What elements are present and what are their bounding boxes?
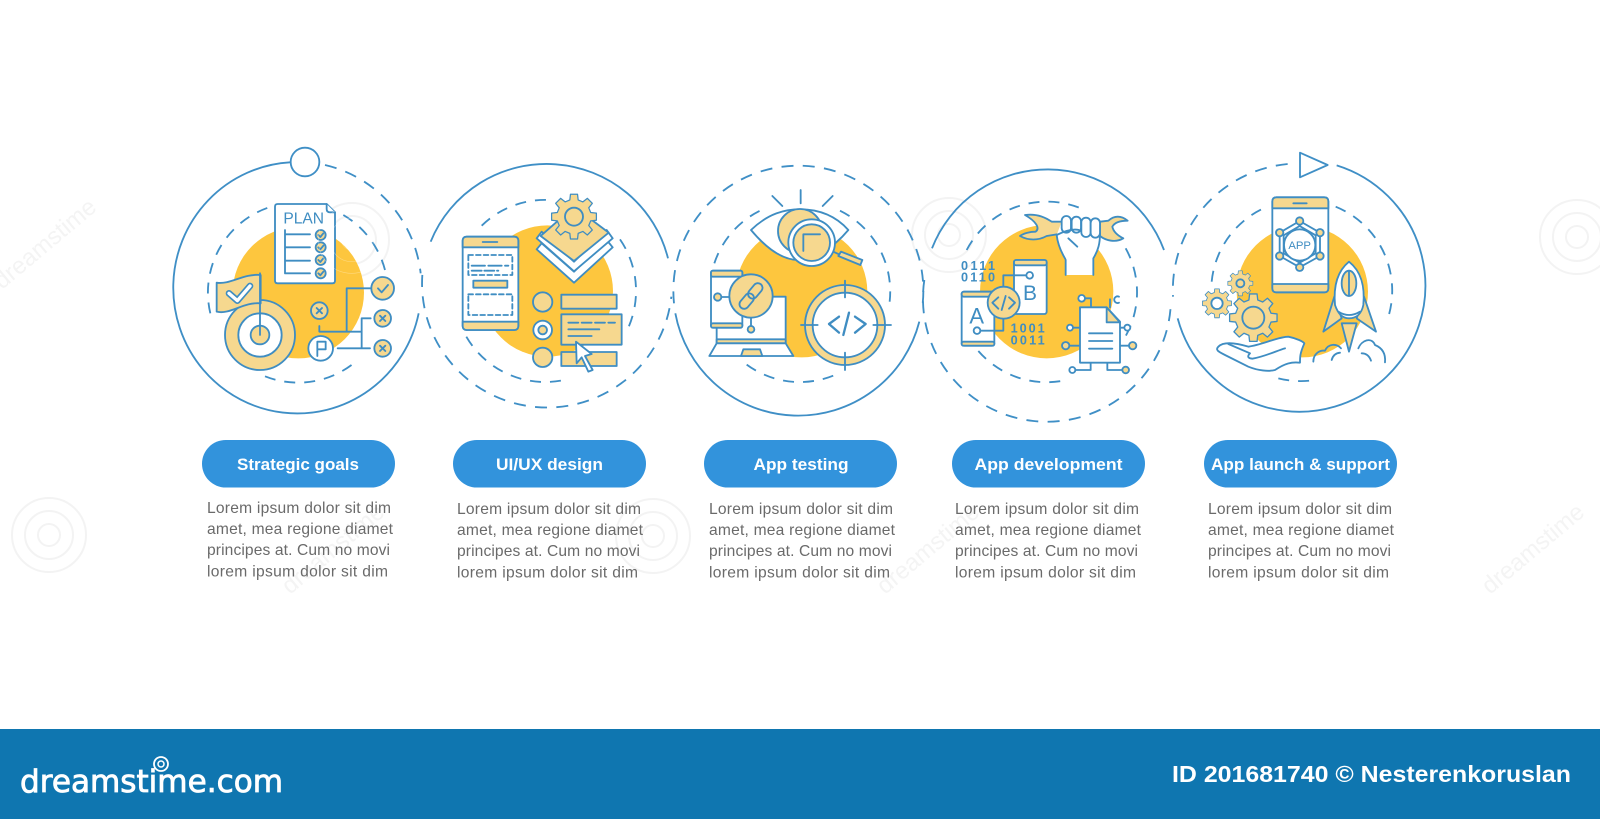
text block: amet, mea regione diamet [207,521,394,538]
column: strategic goals [202,440,395,580]
footer bar [0,729,1600,819]
yellow blob [233,227,364,358]
pill: UI/UX design: UI/UX design [496,456,603,474]
icon: app phone: APP [1288,240,1311,252]
icon: A/B phones with code: 0111 [961,259,995,273]
column: app launch and support [1204,440,1397,582]
panel: UI/UX design circle [422,164,671,408]
pill: app testing [704,440,897,488]
outer ring [923,169,1171,422]
watermark spiral on icon [318,207,385,273]
pill: app launch and support: App launch & support [1211,456,1391,474]
icon: code target [801,281,891,370]
inner dashed ring [466,200,636,382]
icon: A/B phones with code: 1001 [1011,321,1045,335]
pill: app launch and support [1204,440,1397,488]
outer ring with arrow [1173,153,1425,412]
icon: circuit document [1062,295,1136,373]
inner dashed ring [208,207,385,383]
text block: Lorem ipsum dolor sit dim [955,501,1139,518]
panel: app testing circle [673,166,923,416]
text block: Lorem ipsum dolor sit dim [1208,501,1392,518]
text block: principes at. Cum no movi [709,543,892,560]
icon: devices with link [709,271,793,356]
text block [457,501,644,582]
text block: principes at. Cum no movi [1208,543,1391,560]
icon: plan document: PLAN [283,210,324,227]
pill: strategic goals [202,440,395,488]
yellow blob [482,225,613,357]
icon: fist with wrench [1020,215,1128,275]
icon: plan document [275,204,335,283]
pill: strategic goals: Strategic goals [237,456,359,474]
footer image id and author: ID 201681740 © Nesterenkoruslan [1172,761,1571,787]
text block: lorem ipsum dolor sit dim [955,564,1136,582]
outer ring [422,164,671,408]
inner dashed ring [1212,207,1392,381]
yellow blob [1237,226,1368,357]
text block: lorem ipsum dolor sit dim [709,564,890,582]
icon: A/B phones with code: B [1023,282,1037,305]
pill: app development [952,440,1145,488]
outer ring with node [173,148,421,413]
text block: lorem ipsum dolor sit dim [1208,564,1389,582]
column: app development [952,440,1145,582]
footer logo text: dreamstime.com [20,764,283,800]
icon: A/B phones with code: A [969,303,984,328]
icon: target with flag [217,273,295,370]
pill: app development: App development [974,456,1123,474]
panel: app development circle [923,169,1171,422]
text block: amet, mea regione diamet [955,522,1142,539]
watermark pattern: dreamstime [872,498,985,600]
text block: principes at. Cum no movi [457,543,640,560]
icon: A/B phones with code [961,259,1047,347]
inner dashed ring [714,211,890,382]
yellow blob [980,225,1113,358]
outer ring [673,166,923,416]
text block [955,501,1142,582]
column: UI/UX design [453,440,646,582]
watermark pattern: dreamstime [277,498,390,600]
text block: amet, mea regione diamet [1208,522,1395,539]
text block: amet, mea regione diamet [457,522,644,539]
text block: lorem ipsum dolor sit dim [457,564,638,582]
icon: rocket [1313,262,1385,362]
icon: A/B phones with code: 0110 [961,271,995,285]
watermark pattern [0,193,1600,600]
text block: Lorem ipsum dolor sit dim [457,501,641,518]
icon: radio list with cursor [533,292,622,372]
text block: Lorem ipsum dolor sit dim [709,501,893,518]
icon: phone wireframe [463,237,518,330]
panel: strategic goals circle [173,148,421,413]
watermark pattern: dreamstime [1477,498,1590,600]
pill: UI/UX design [453,440,646,488]
text block [1208,501,1395,582]
text block: principes at. Cum no movi [955,543,1138,560]
pill: app testing: App testing [754,456,848,474]
icon: app phone [1272,197,1328,292]
text block [709,501,896,582]
text block: Lorem ipsum dolor sit dim [207,500,391,517]
icon: layers with gear [537,194,613,283]
icon: A/B phones with code: 0011 [1011,333,1045,347]
text block: amet, mea regione diamet [709,522,896,539]
icon: eye with magnifier [751,190,862,266]
text block: lorem ipsum dolor sit dim [207,564,388,580]
text block [207,500,394,580]
column: app testing [704,440,897,582]
icon: gears over hand [1203,271,1304,371]
panel: app launch and support circle [1173,153,1425,412]
text block: principes at. Cum no movi [207,542,390,559]
icon: decision tree [308,277,394,361]
yellow blob [736,226,867,357]
inner dashed ring [967,202,1137,382]
